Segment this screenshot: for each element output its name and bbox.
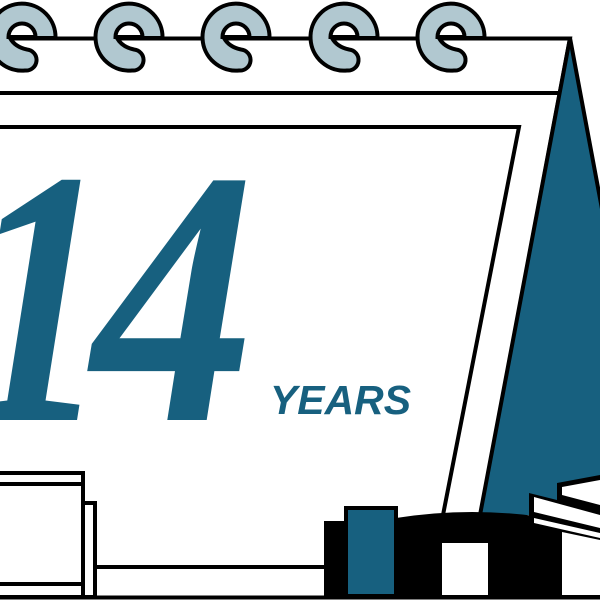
triangle edges [480, 38, 600, 515]
spiral binding rings [0, 4, 485, 71]
black building silhouette [324, 512, 600, 596]
base shelf lines [0, 567, 600, 598]
building window [442, 543, 488, 595]
number 14: 4 [87, 96, 256, 499]
stacked pages right [529, 475, 600, 595]
calendar outline [0, 38, 570, 515]
left book stack [0, 473, 95, 597]
binding line over rings [10, 36, 490, 40]
number 14 [0, 96, 256, 500]
years label: YEARS [270, 377, 411, 423]
ring holes [8, 24, 464, 37]
blue tower [346, 508, 396, 596]
blue back page triangle [480, 42, 600, 515]
